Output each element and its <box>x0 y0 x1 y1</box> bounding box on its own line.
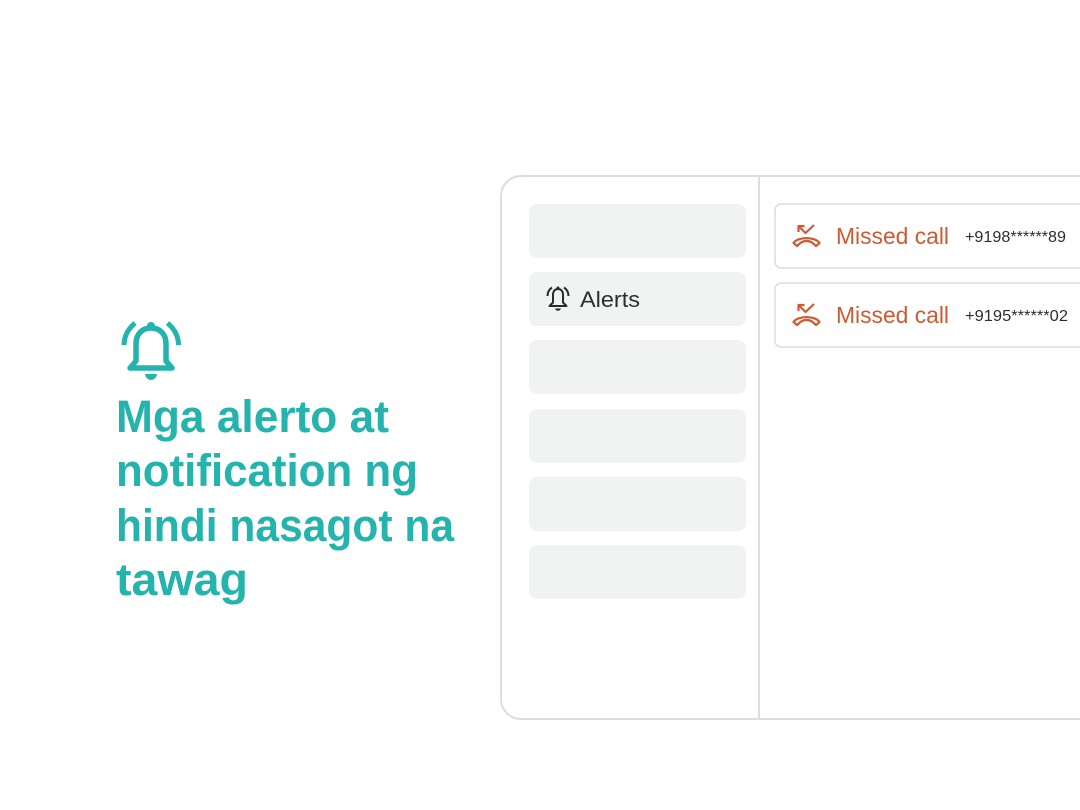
sidebar item: alerts <box>529 272 746 326</box>
sidebar item 6 <box>529 545 746 599</box>
sidebar item 3 <box>529 340 746 394</box>
label: missed call: Missed call <box>836 302 949 328</box>
icon: missed call <box>794 304 820 325</box>
card: missed call 1 <box>775 204 1080 268</box>
heading: hindi nasagot na <box>116 500 455 551</box>
card: missed call 2 <box>775 283 1080 347</box>
heading: notification ng <box>116 445 418 496</box>
heading: Mga alerto at <box>116 391 389 442</box>
icon: teal bell <box>124 322 178 380</box>
heading: tawag <box>116 554 248 605</box>
sidebar item 5 <box>529 477 746 531</box>
icon: small bell <box>548 286 568 311</box>
icon: missed call <box>794 225 820 246</box>
panel: app window <box>501 176 1080 719</box>
label: Alerts: Alerts <box>580 287 640 312</box>
phone number: +9198******89 <box>965 229 1066 246</box>
sidebar item 4 <box>529 409 746 463</box>
label: missed call: Missed call <box>836 223 949 249</box>
sidebar item 1 <box>529 204 746 258</box>
heading <box>116 391 455 605</box>
phone number: +9195******02 <box>965 308 1068 325</box>
